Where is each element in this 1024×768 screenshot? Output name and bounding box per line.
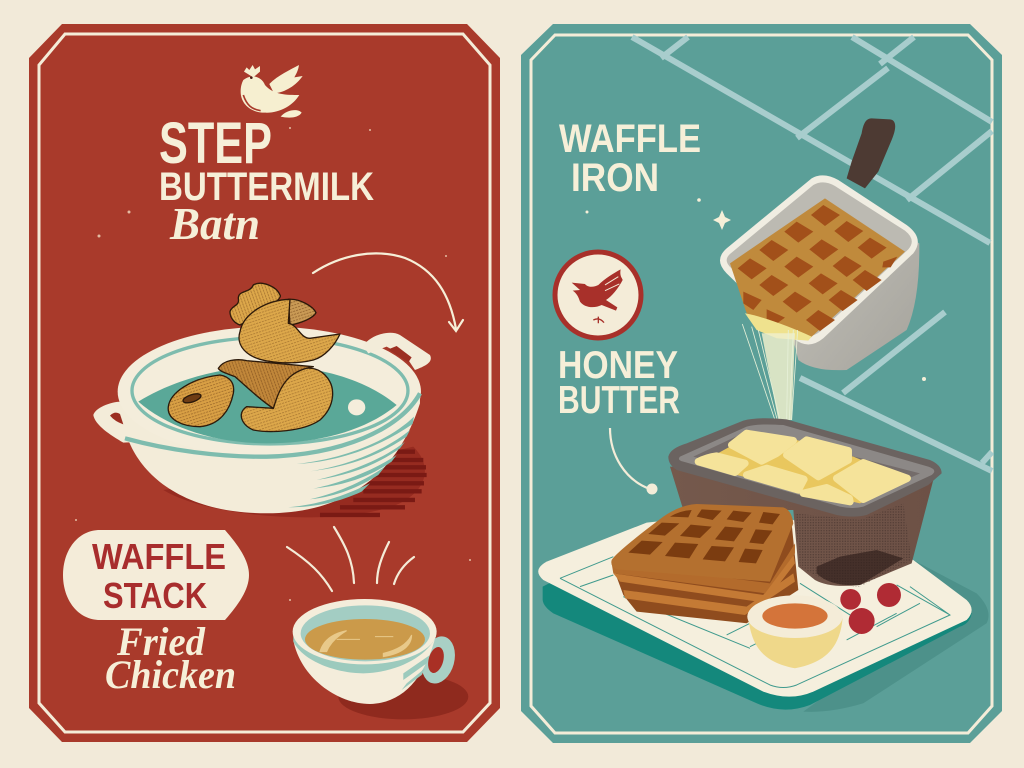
plate top — [538, 510, 972, 697]
bowl stripes — [288, 417, 414, 507]
cup inner wall — [301, 605, 430, 661]
dip cup rim — [747, 595, 843, 638]
chicken: middle — [218, 360, 313, 408]
tin scorch — [817, 550, 903, 585]
plate ribs — [560, 557, 950, 687]
plate shadow — [803, 560, 989, 712]
dipping cup — [747, 595, 843, 668]
butter cubes — [698, 433, 907, 502]
label text waffle: WAFFLE — [92, 536, 226, 577]
cup rim — [293, 599, 437, 664]
red panel shape — [29, 24, 500, 742]
badge circle — [555, 252, 641, 338]
title: buttermilk: BUTTERMILK — [159, 165, 374, 209]
icon: rooster — [241, 65, 303, 118]
water highlight — [348, 399, 365, 415]
melting butter — [745, 313, 812, 341]
bowl rim — [118, 327, 421, 457]
baking tin — [611, 418, 942, 668]
berry 3 — [849, 608, 875, 634]
tin inner — [679, 424, 934, 508]
tin body — [670, 467, 933, 586]
teal panel inner border — [531, 35, 992, 733]
pan handle — [847, 118, 895, 188]
broth — [305, 619, 425, 660]
teal panel shape — [521, 24, 1002, 743]
label: waffle stack — [63, 530, 249, 620]
butter cube 5 — [837, 463, 907, 499]
plate side — [543, 525, 972, 710]
chicken pieces — [168, 283, 340, 432]
waffle top — [611, 504, 793, 582]
bowl inner ring — [132, 337, 408, 444]
icon: sparkle — [713, 210, 731, 230]
pan rim — [720, 175, 918, 344]
red panel inner border — [39, 34, 490, 732]
broth highlight — [320, 631, 412, 657]
bowl rim stripe — [125, 393, 420, 457]
illustration: waffle iron pan — [720, 118, 919, 420]
butter cube 6 — [803, 488, 850, 502]
waffle in pan — [730, 198, 905, 338]
illustration: cup — [293, 599, 468, 719]
bowl handle left — [93, 402, 170, 443]
illustration: plate with waffles and butter — [538, 418, 989, 712]
chicken: left piece — [168, 375, 234, 427]
icon: badge with bird — [555, 252, 641, 338]
chicken: comb piece — [230, 283, 280, 325]
tin rim — [668, 418, 942, 517]
cup teal band — [293, 630, 437, 673]
label pill — [63, 530, 249, 620]
chicken: lower right — [241, 368, 333, 432]
arrow: curved to bowl — [313, 253, 463, 331]
cup shadow — [338, 674, 468, 719]
bowl shadow — [163, 447, 427, 517]
tin hatch burn — [795, 503, 912, 587]
illustration: bowl with chicken — [93, 283, 431, 517]
butter cube 2 — [732, 433, 793, 461]
steam lines — [287, 527, 414, 591]
specks — [75, 127, 471, 601]
buttermilk water — [138, 366, 397, 443]
chicken: upper — [239, 299, 340, 363]
berry 2 — [877, 583, 901, 607]
cup handle — [417, 633, 460, 687]
bowl body — [128, 387, 420, 513]
chicken: tail — [288, 299, 316, 325]
butter cube 3 — [787, 440, 848, 477]
waffle cells — [628, 509, 780, 563]
script: fried: Fried — [116, 619, 206, 664]
heading: iron: IRON — [571, 156, 659, 200]
butter base — [697, 440, 910, 503]
butter cube 4 — [747, 468, 804, 490]
cup body — [293, 632, 437, 704]
pan interior — [727, 182, 912, 336]
dip sauce — [762, 603, 828, 629]
butter stream — [742, 324, 798, 420]
waffle side layers — [612, 523, 798, 623]
panel: step buttermilk bath — [29, 24, 500, 742]
pan side — [793, 210, 919, 370]
sparkle dots — [586, 198, 926, 381]
waffle stack — [611, 504, 798, 623]
berries — [840, 583, 901, 634]
heading: honey: HONEY — [558, 344, 678, 387]
berry 1 — [840, 589, 861, 610]
heading: waffle: WAFFLE — [559, 117, 701, 161]
script: chicken: Chicken — [105, 652, 236, 697]
title: step: STEP — [159, 111, 272, 176]
cup stripes — [402, 655, 430, 690]
decorative lines — [632, 37, 992, 471]
bowl handle right — [363, 333, 431, 370]
heading: butter: BUTTER — [558, 379, 680, 422]
dip cup body — [748, 618, 843, 668]
bird silhouette — [572, 269, 623, 323]
butter cube 1 — [698, 456, 745, 472]
pointer line — [610, 428, 658, 494]
label text stack: STACK — [103, 575, 207, 616]
title: bath script: Batn — [169, 198, 260, 249]
